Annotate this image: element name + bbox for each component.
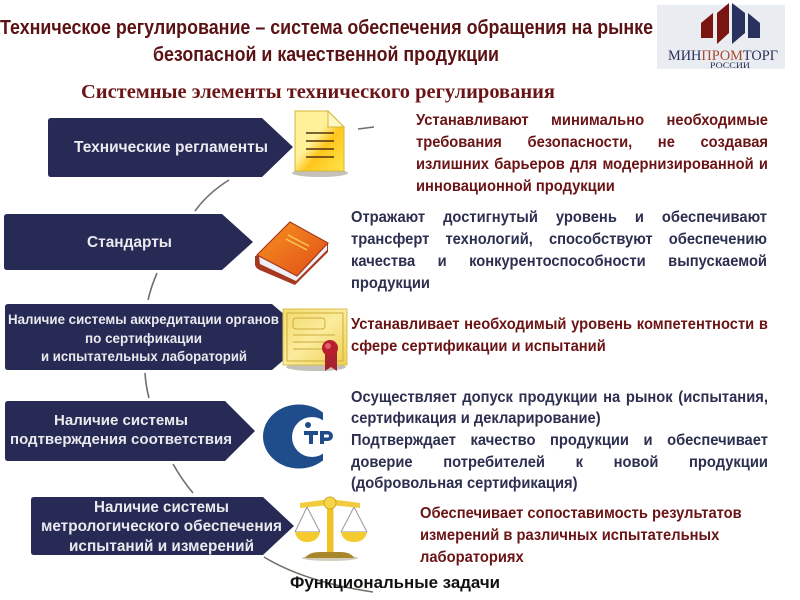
text block: conformity description: сертификация и декларирование) — [351, 410, 601, 427]
text block: standards description: качества и конкурентоспособности выпускаемой — [351, 253, 767, 270]
logo: РОССИИ — [710, 60, 750, 70]
arrow box: conformity: подтверждения соответствия — [10, 431, 232, 448]
text block: conformity description: доверие потребителей к новой продукции — [351, 454, 768, 471]
text block: metrology description — [420, 505, 742, 566]
arrow box: standards: Стандарты — [87, 234, 172, 251]
arrow box: regulations: Технические регламенты — [74, 139, 268, 156]
text block: accreditation description: сфере сертификации и испытаний — [351, 338, 606, 355]
arrow box: metrology: метрологического обеспечения — [41, 518, 282, 535]
text block: conformity description: Подтверждает качество продукции и обеспечивает — [351, 432, 768, 449]
text block: standards description: продукции — [351, 275, 430, 292]
arrow box: regulations — [48, 118, 293, 177]
text block: standards description: Отражают достигнутый уровень и обеспечивают — [351, 209, 767, 226]
text block: metrology description: Обеспечивает сопоставимость результатов — [420, 505, 742, 522]
icon: scales — [295, 497, 367, 561]
text block: regulations description: требования безопасности, не создавая — [416, 134, 768, 151]
arrow box: metrology — [31, 497, 294, 555]
logo: МИНПРОМТОРГ — [668, 48, 778, 64]
arrow box: accreditation: Наличие системы аккредитации органов — [8, 311, 279, 327]
arrow box: conformity: Наличие системы — [54, 412, 188, 429]
icon: STR logo — [263, 400, 337, 472]
text block: accreditation description — [351, 316, 768, 355]
text block: regulations description: инновационной продукции — [416, 178, 615, 195]
text block: metrology description: измерений в различных испытательных — [420, 527, 719, 544]
arrow box: conformity — [5, 401, 255, 461]
text block: conformity description: Осуществляет допуск продукции на рынок (испытания, — [351, 389, 768, 406]
icon: certificate — [283, 309, 347, 371]
text block: regulations description: излишних барьеров для модернизированной и — [416, 156, 768, 173]
arrow box: standards — [4, 214, 253, 270]
footer caption: Функциональные задачи — [290, 574, 500, 592]
title: безопасной и качественной продукции — [153, 43, 499, 66]
arrow box: accreditation: по сертификации — [85, 330, 202, 346]
text block: standards description: трансферт технологий, способствуют обеспечению — [351, 231, 767, 248]
connector lines — [145, 127, 374, 592]
logo — [657, 3, 785, 70]
icon: book — [255, 222, 328, 285]
text block: accreditation description: Устанавливает необходимый уровень компетентности в — [351, 316, 768, 333]
arrow box: metrology: испытаний и измерений — [69, 538, 254, 555]
text block: conformity description — [351, 389, 768, 492]
text block: conformity description: (добровольная сертификация) — [351, 475, 578, 492]
arrow box: metrology: Наличие системы — [94, 499, 229, 516]
arrow box: accreditation: и испытательных лабораторий — [41, 348, 247, 364]
text block: regulations description: Устанавливают минимально необходимые — [416, 112, 768, 129]
arrow box: accreditation — [5, 304, 286, 370]
title: Техническое регулирование – система обеспечения обращения на рынке — [0, 16, 653, 39]
text block: metrology description: лабораториях — [420, 549, 524, 566]
text block: standards description — [351, 209, 767, 292]
subtitle: Системные элементы технического регулирования — [81, 81, 555, 103]
text block: regulations description — [416, 112, 768, 195]
title — [0, 16, 653, 66]
icon: document — [292, 111, 348, 177]
